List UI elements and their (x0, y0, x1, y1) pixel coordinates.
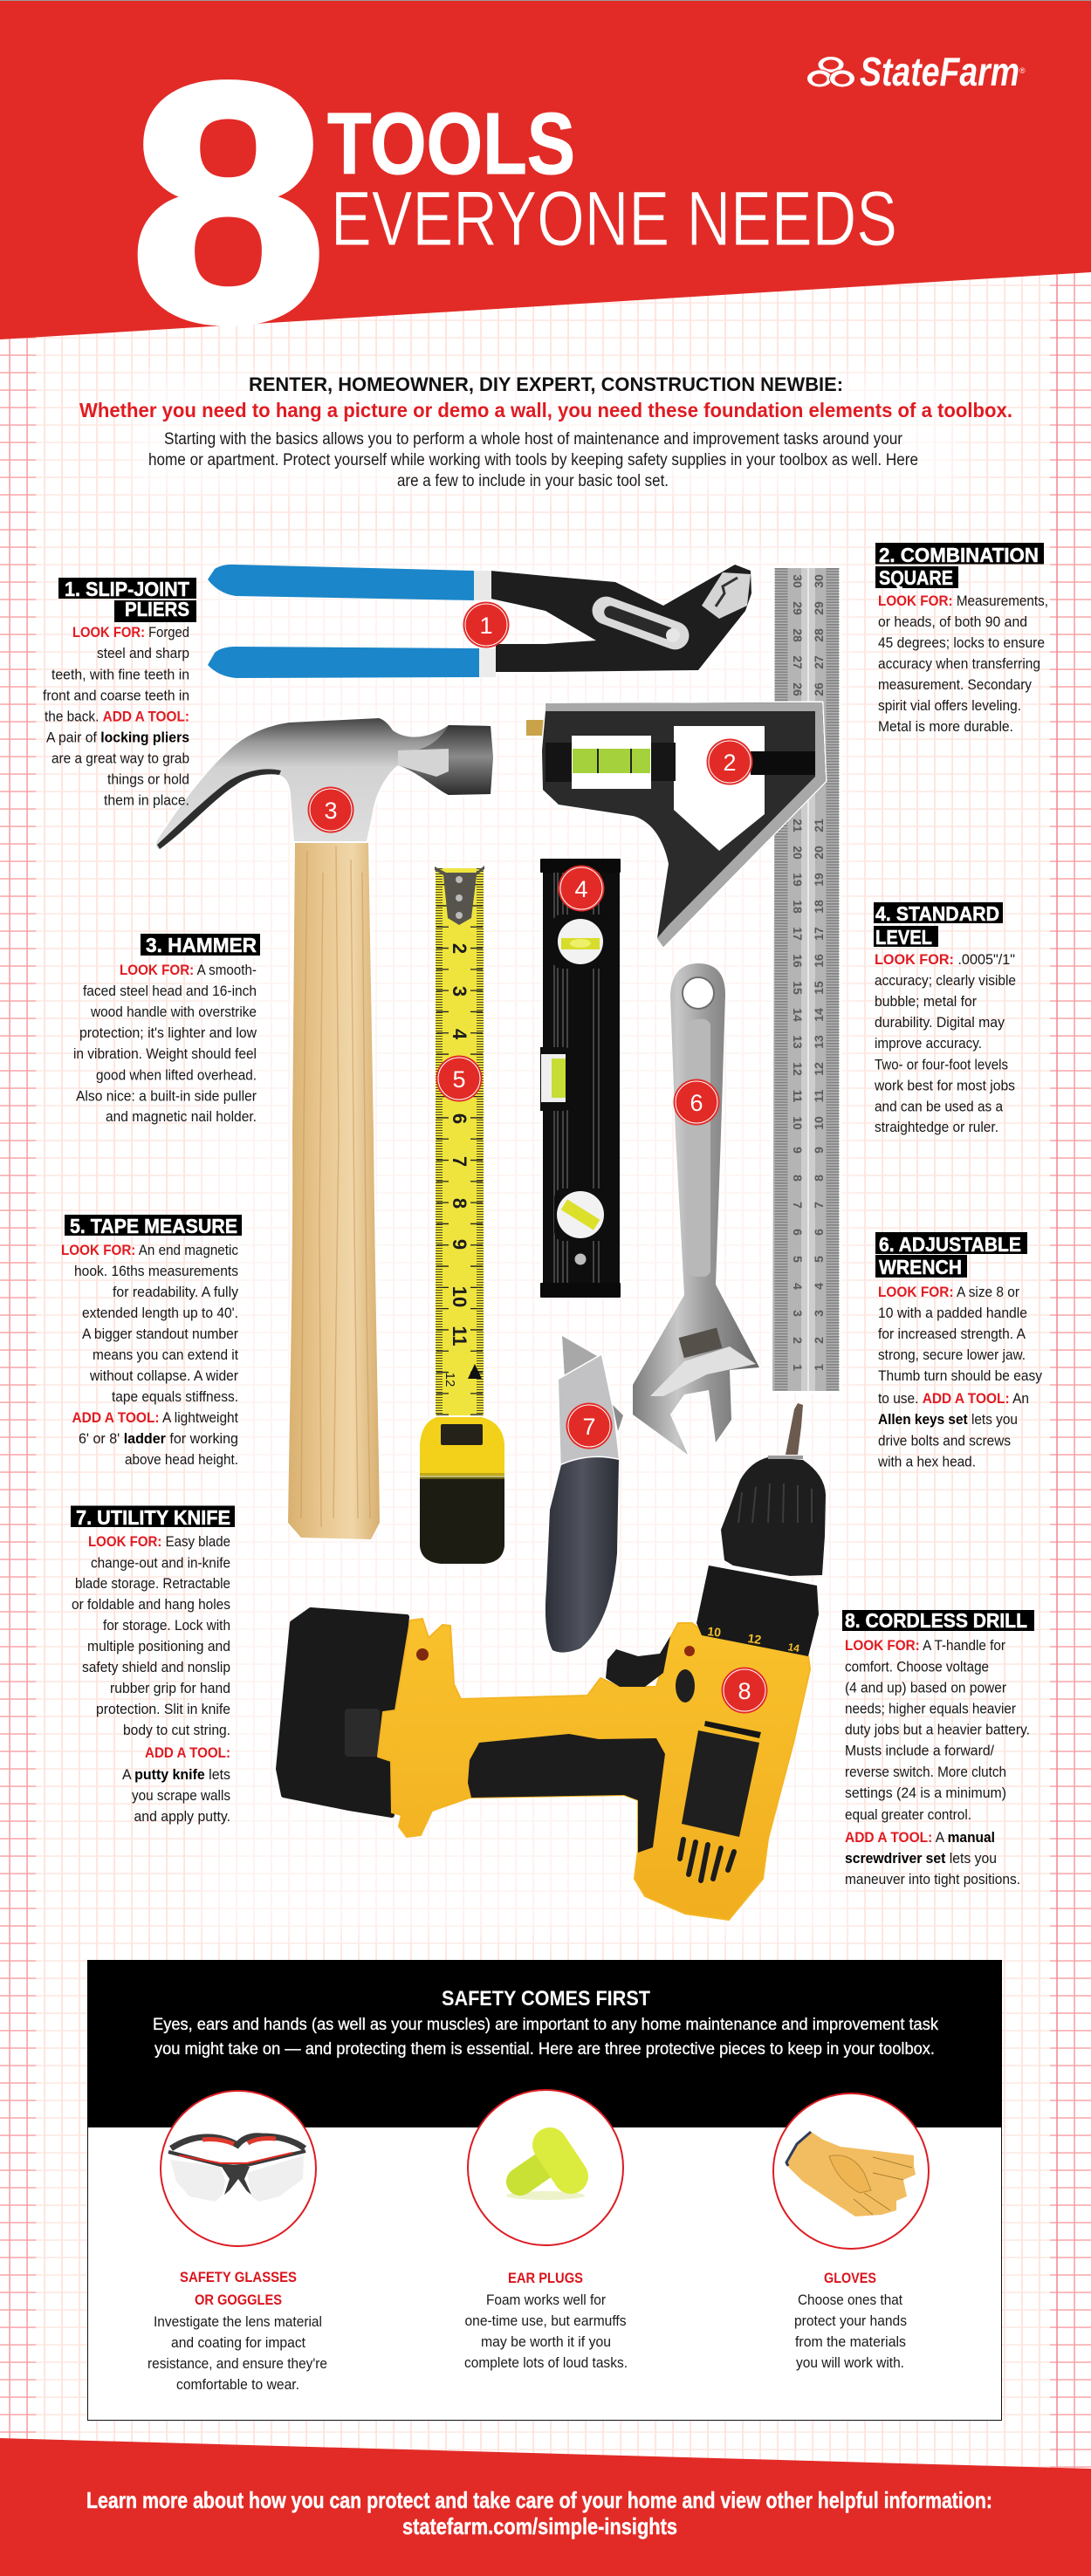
ruler: 11 (791, 1090, 805, 1103)
heading: 7. UTILITY KNIFE (76, 1506, 230, 1529)
ruler: 4 (812, 1283, 826, 1290)
State Farm logo: StateFarm (860, 49, 1019, 94)
body text: LOOK FOR: A size 8 or (878, 1284, 1019, 1300)
drill panel and details (416, 1646, 761, 1881)
tape blade: 8 (449, 1198, 470, 1209)
column: safety glasses: SAFETY GLASSES (180, 2269, 297, 2285)
marker 8 (721, 1667, 768, 1714)
drill battery (278, 1610, 407, 1815)
tool: combination square (526, 568, 839, 1391)
ruler: 1 (791, 1364, 805, 1371)
body text: ADD A TOOL: A manual (845, 1829, 995, 1846)
heading: 2. COMBINATION (879, 544, 1039, 566)
intro paragraph: home or apartment. Protect yourself while working with tools by keeping safety supplies in your toolbox as well. Here (148, 451, 918, 469)
body text: drive bolts and screws (878, 1433, 1011, 1449)
heading: 4. STANDARD (875, 902, 999, 925)
ruler: 19 (791, 873, 805, 887)
icon: gloves (773, 2093, 929, 2249)
callout 6: adjustable wrench (875, 1232, 1042, 1470)
ruler: 15 (791, 981, 805, 995)
safety intro: you might take on — and protecting them is essential. Here are three protective pieces to keep in your toolbox. (154, 2040, 935, 2059)
body text (61, 1242, 238, 1468)
marker 2: 2 (723, 750, 737, 776)
body text: hook. 16ths measurements (74, 1263, 238, 1279)
ruler: 11 (812, 1089, 826, 1102)
body text: without collapse. A wider (89, 1367, 238, 1384)
heading (874, 902, 1003, 949)
body text: good when lifted overhead. (96, 1066, 257, 1084)
body text: 10 with a padded handle (878, 1305, 1027, 1321)
callout 7: utility knife (71, 1506, 235, 1825)
knife blade (562, 1336, 603, 1379)
body text: body to cut string. (123, 1722, 230, 1738)
tape blade: 9 (449, 1239, 470, 1250)
drill collar (696, 1565, 819, 1656)
column: ear plugs: may be worth it if you (481, 2333, 611, 2350)
heading: WRENCH (879, 1256, 962, 1278)
body text: duty jobs but a heavier battery. (845, 1721, 1030, 1738)
column: safety glasses: and coating for impact (171, 2334, 305, 2351)
ruler: 21 (791, 819, 805, 832)
column: safety glasses: comfortable to wear. (176, 2376, 299, 2393)
ruler: 9 (812, 1147, 826, 1154)
body text (845, 1637, 1030, 1887)
body text: teeth, with fine teeth in (51, 667, 189, 682)
body text: A putty knife lets (122, 1766, 230, 1783)
body text: change-out and in-knife (91, 1555, 230, 1571)
drill yellow body (378, 1619, 810, 1920)
body text: Metal is more durable. (878, 718, 1013, 735)
body text (878, 593, 1048, 735)
ruler: 14 (791, 1008, 805, 1022)
ruler: 6 (791, 1229, 805, 1236)
body text: above head height. (125, 1451, 238, 1468)
body text: spirit vial offers leveling. (878, 697, 1021, 714)
intro red subheading: Whether you need to hang a picture or demo a wall, you need these foundation elements of a toolbox. (79, 399, 1012, 421)
drill trigger (606, 1636, 670, 1687)
callout 3: hammer (73, 934, 260, 1125)
drill clutch numbers: 10 (707, 1624, 722, 1640)
body text: A pair of locking pliers (46, 730, 189, 745)
heading: PLIERS (125, 598, 189, 620)
tape blade: 4 (449, 1029, 470, 1040)
body text: in vibration. Weight should feel (73, 1045, 257, 1062)
tool: adjustable wrench (633, 963, 759, 1455)
ruler: 5 (791, 1256, 805, 1263)
ruler: 4 (791, 1283, 805, 1290)
ruler: 18 (812, 900, 826, 914)
callout 1: slip-joint pliers (43, 578, 196, 808)
body text: blade storage. Retractable (75, 1575, 230, 1592)
body text: and magnetic nail holder. (106, 1108, 257, 1125)
body text: equal greater control. (845, 1806, 971, 1823)
body text: ADD A TOOL: (145, 1744, 230, 1761)
body text: screwdriver set lets you (845, 1850, 997, 1867)
body text: Musts include a forward/ (845, 1742, 994, 1759)
pliers jaw and slot (588, 572, 751, 654)
hammer head (156, 718, 493, 849)
drill clutch numbers: 12 (747, 1631, 763, 1647)
drill clutch numbers: 14 (787, 1641, 800, 1655)
heading: 6. ADJUSTABLE (879, 1233, 1021, 1256)
ruler: 7 (791, 1202, 805, 1209)
ruler: 29 (791, 601, 805, 615)
pliers upper grip (208, 565, 476, 600)
ruler: 1 (812, 1364, 826, 1371)
body text: strong, secure lower jaw. (878, 1346, 1026, 1363)
body text: steel and sharp (97, 645, 189, 661)
heading (875, 543, 1044, 589)
ruler: 14 (812, 1008, 826, 1022)
wrench body (633, 963, 759, 1455)
footer band (0, 2438, 1091, 2576)
intro heading: RENTER, HOMEOWNER, DIY EXPERT, CONSTRUCTION NEWBIE: (249, 373, 843, 395)
ruler: 2 (791, 1337, 805, 1344)
callout 2: combination square (875, 543, 1048, 735)
body text: settings (24 is a minimum) (845, 1785, 1006, 1801)
ruler: 27 (791, 655, 805, 669)
ruler: 27 (812, 655, 826, 669)
ruler: 18 (791, 900, 805, 914)
heading: 5. TAPE MEASURE (70, 1215, 237, 1237)
body text: comfort. Choose voltage (845, 1658, 989, 1675)
marker 1 (463, 602, 510, 647)
body text: Also nice: a built-in side puller (76, 1087, 257, 1105)
heading: SQUARE (879, 566, 953, 589)
intro paragraph: Starting with the basics allows you to perform a whole host of maintenance and improvement tasks around your (164, 430, 903, 449)
ruler: 16 (812, 954, 826, 968)
hammer handle (288, 841, 380, 1539)
ruler: 5 (812, 1256, 826, 1263)
marker 5: 5 (452, 1066, 466, 1093)
body text: measurement. Secondary (878, 676, 1032, 693)
ruler: 16 (791, 954, 805, 968)
marker 2 (707, 738, 752, 785)
ruler: 29 (812, 601, 826, 615)
marker 6: 6 (690, 1090, 703, 1116)
body text: or foldable and hang holes (72, 1596, 230, 1613)
icon: ear plugs (468, 2090, 623, 2245)
pliers metal body (491, 565, 751, 672)
ruler: 28 (812, 628, 826, 642)
body text: them in place. (104, 792, 189, 808)
body text: to use. ADD A TOOL: An (878, 1390, 1029, 1407)
ruler: 9 (791, 1147, 805, 1154)
body text: and can be used as a (875, 1098, 1003, 1115)
body text: with a hex head. (877, 1454, 976, 1470)
body text: protection. Slit in knife (96, 1701, 230, 1717)
tape case (420, 1417, 504, 1564)
ruler: 3 (812, 1310, 826, 1317)
column: gloves: GLOVES (824, 2270, 876, 2286)
body text: durability. Digital may (875, 1014, 1005, 1031)
body text: or heads, of both 90 and (878, 613, 1027, 630)
column: ear plugs: complete lots of loud tasks. (464, 2354, 628, 2371)
body text: accuracy; clearly visible (875, 972, 1016, 989)
body text: 45 degrees; locks to ensure (878, 634, 1045, 651)
header band (0, 0, 1091, 392)
tape blade: 7 (449, 1156, 470, 1167)
ruler: 17 (812, 927, 826, 941)
body text: Allen keys set lets you (878, 1411, 1018, 1428)
body text: needs; higher equals heavier (845, 1700, 1016, 1717)
marker 7 (566, 1403, 613, 1449)
heading: 3. HAMMER (146, 934, 257, 956)
body text: the back. ADD A TOOL: (45, 709, 189, 724)
tape blade: 10 (449, 1286, 470, 1307)
body text: work best for most jobs (874, 1077, 1015, 1094)
column: safety glasses: OR GOGGLES (195, 2292, 282, 2308)
ruler: 8 (812, 1175, 826, 1182)
tool: cordless drill (278, 1403, 826, 1920)
body text: things or hold (107, 771, 189, 787)
panel: safety comes first (87, 1960, 1002, 2421)
column: gloves: from the materials (795, 2333, 906, 2350)
body text: wood handle with overstrike (90, 1004, 257, 1020)
column: gloves (794, 2270, 907, 2371)
body text: protection; it's lighter and low (79, 1024, 257, 1041)
footer text: statefarm.com/simple-insights (402, 2513, 677, 2539)
column: ear plugs: Foam works well for (486, 2292, 606, 2308)
drill bit (786, 1403, 803, 1455)
marker 5 (436, 1056, 482, 1101)
ruler: 30 (812, 574, 826, 588)
body text: for increased strength. A (878, 1326, 1026, 1342)
callout 4: standard level (874, 902, 1016, 1135)
tape blade: 2 (449, 943, 470, 954)
body text: front and coarse teeth in (43, 688, 189, 703)
body text: multiple positioning and (87, 1638, 230, 1655)
body text: Thumb turn should be easy (878, 1367, 1042, 1384)
body text: LOOK FOR: A T-handle for (845, 1637, 1005, 1654)
marker 8: 8 (738, 1678, 751, 1704)
body text: you scrape walls (132, 1787, 230, 1804)
body text: 6' or 8' ladder for working (79, 1430, 238, 1447)
tool: slip-joint pliers (208, 565, 751, 678)
tape blade: 3 (449, 986, 470, 997)
marker 7: 7 (582, 1414, 596, 1440)
body text: LOOK FOR: A smooth- (120, 962, 257, 978)
marker 4: 4 (574, 876, 588, 902)
body text (877, 1284, 1042, 1470)
body text: A bigger standout number (82, 1326, 238, 1342)
tape blade: 11 (449, 1326, 470, 1346)
body text: (4 and up) based on power (845, 1679, 1006, 1696)
tool: utility knife (546, 1336, 623, 1653)
tool: hammer (156, 718, 493, 1539)
heading: 8. CORDLESS DRILL (845, 1609, 1027, 1632)
ruler: 12 (812, 1062, 826, 1076)
ruler: 26 (791, 682, 805, 696)
body text: maneuver into tight positions. (845, 1871, 1020, 1887)
body text: safety shield and nonslip (82, 1659, 230, 1675)
tape blade (435, 866, 484, 1418)
level body (540, 859, 621, 1298)
ruler: 13 (791, 1035, 805, 1049)
title: tools: TOOLS (327, 95, 575, 193)
safety heading: SAFETY COMES FIRST (442, 1987, 650, 2011)
body text: reverse switch. More clutch (845, 1764, 1006, 1780)
column: gloves: you will work with. (796, 2354, 904, 2371)
safety intro: Eyes, ears and hands (as well as your muscles) are important to any home maintenance and improvement task (153, 2016, 938, 2034)
body text: rubber grip for hand (110, 1680, 230, 1696)
ruler (772, 568, 839, 1391)
ruler: 21 (812, 819, 826, 832)
drill clutch numbers (707, 1624, 800, 1655)
column: gloves: Choose ones that (798, 2292, 902, 2308)
body text: LOOK FOR: An end magnetic (61, 1242, 238, 1258)
column: ear plugs: one-time use, but earmuffs (464, 2312, 627, 2329)
ruler: 30 (791, 574, 805, 588)
callout 8: cordless drill (842, 1609, 1034, 1887)
marker 3 (307, 787, 354, 832)
body text: tape equals stiffness. (112, 1388, 238, 1405)
tape blade: 6 (449, 1113, 470, 1124)
tool: tape measure (420, 866, 504, 1564)
ruler: 20 (791, 846, 805, 860)
square head (526, 702, 826, 947)
callout 5: tape measure (61, 1215, 242, 1468)
intro text (79, 373, 1012, 490)
drill chuck (721, 1456, 826, 1576)
footer text (86, 2487, 992, 2539)
drill grip (468, 1734, 665, 1853)
body text (73, 962, 257, 1125)
body text: and apply putty. (134, 1808, 230, 1825)
ruler: 7 (812, 1202, 826, 1209)
body text (72, 1533, 230, 1825)
body text: straightedge or ruler. (875, 1119, 998, 1135)
intro paragraph (148, 430, 918, 490)
column: safety glasses: Investigate the lens material (154, 2313, 322, 2330)
ruler: 19 (812, 873, 826, 887)
body text: LOOK FOR: Measurements, (878, 593, 1048, 609)
body text: LOOK FOR: .0005"/1" (875, 951, 1015, 968)
ruler: 15 (812, 981, 826, 995)
pliers lower grip (208, 647, 480, 678)
ruler: 3 (791, 1310, 805, 1317)
body text: for readability. A fully (113, 1284, 238, 1300)
knife handle (546, 1457, 619, 1653)
heading: 1. SLIP-JOINT (65, 578, 189, 600)
body text (874, 951, 1016, 1135)
column: safety glasses: resistance, and ensure they're (148, 2355, 327, 2372)
body text: bubble; metal for (875, 993, 977, 1010)
body text: for storage. Lock with (103, 1617, 230, 1634)
body text: means you can extend it (93, 1346, 238, 1363)
ruler: 26 (812, 682, 826, 696)
ruler: 20 (812, 846, 826, 860)
number markers (307, 602, 768, 1714)
body text: ADD A TOOL: A lightweight (72, 1409, 238, 1426)
body text: Two- or four-foot levels (875, 1056, 1008, 1073)
wrench knurl (650, 1327, 756, 1396)
State Farm logo (806, 49, 1026, 94)
intro paragraph: are a few to include in your basic tool set. (397, 472, 669, 490)
top vial (552, 915, 608, 969)
body text: faced steel head and 16-inch (83, 983, 257, 999)
State Farm logo: ® (1019, 66, 1026, 75)
body text (43, 624, 189, 808)
marker 3: 3 (324, 798, 338, 824)
ruler: 8 (791, 1175, 805, 1182)
safety intro (153, 2016, 938, 2059)
body text: accuracy when transferring (878, 655, 1040, 672)
ruler: 12 (791, 1062, 805, 1076)
middle vial (540, 1047, 573, 1111)
icon: safety glasses (161, 2091, 316, 2246)
column: ear plugs (464, 2270, 628, 2371)
body text: improve accuracy. (875, 1035, 982, 1052)
big number 8: 8 (130, 14, 326, 392)
body text: LOOK FOR: Easy blade (88, 1533, 230, 1550)
column: safety glasses (148, 2269, 327, 2393)
knife body (559, 1355, 619, 1475)
tape blade: 12 (443, 1373, 457, 1387)
ruler: 17 (791, 927, 805, 941)
column: ear plugs: EAR PLUGS (508, 2270, 583, 2286)
marker 1: 1 (479, 613, 493, 639)
heading (58, 578, 196, 622)
ruler: 6 (812, 1229, 826, 1236)
ruler: 28 (791, 628, 805, 642)
ruler: 10 (791, 1116, 805, 1130)
body text: are a great way to grab (51, 750, 189, 766)
marker 6 (674, 1079, 719, 1126)
heading: LEVEL (875, 926, 932, 949)
body text: LOOK FOR: Forged (72, 624, 189, 641)
ruler: 2 (812, 1337, 826, 1344)
heading (875, 1232, 1027, 1278)
column: gloves: protect your hands (794, 2312, 907, 2329)
marker 4 (559, 866, 604, 911)
body text: extended length up to 40'. (82, 1305, 238, 1321)
ruler: 10 (812, 1116, 826, 1130)
bottom vial (554, 1189, 608, 1265)
tool: torpedo level (540, 859, 621, 1298)
title: everyone needs: EVERYONE NEEDS (331, 175, 897, 262)
ruler: 13 (812, 1035, 826, 1049)
